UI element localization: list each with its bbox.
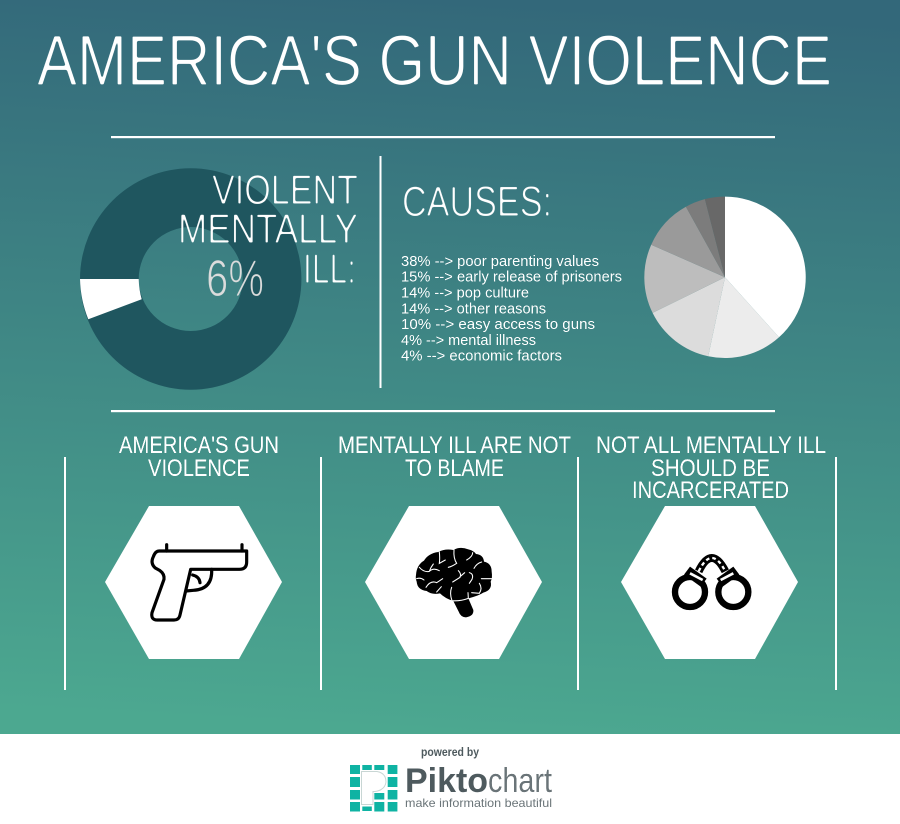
causes list: 4% --> economic factors xyxy=(401,348,562,365)
causes list: 10% --> easy access to guns xyxy=(401,316,595,333)
piktochart wordmark: Pikto xyxy=(405,762,488,800)
donut highlighted slice xyxy=(80,279,142,319)
heading: violent mentally ill: VIOLENT xyxy=(212,166,358,213)
piktochart wordmark: chart xyxy=(488,762,552,800)
heading: causes: CAUSES: xyxy=(402,178,552,226)
heading: violent mentally ill: ILL: xyxy=(303,245,356,292)
hexagon: handcuffs xyxy=(621,506,798,659)
powered by label: powered by xyxy=(421,745,479,759)
heading: not all mentally ill should be incarcerated xyxy=(596,432,826,504)
causes list: 15% --> early release of prisoners xyxy=(401,269,622,286)
heading: violent mentally ill: MENTALLY xyxy=(178,205,358,252)
causes list: 14% --> pop culture xyxy=(401,284,529,301)
causes list xyxy=(401,253,622,365)
piktochart wordmark xyxy=(405,762,552,800)
heading: america's gun violence xyxy=(119,432,279,482)
causes list: 14% --> other reasons xyxy=(401,300,546,317)
icon: pistol xyxy=(152,545,247,620)
icon: brain xyxy=(416,548,492,617)
hexagon: brain xyxy=(365,506,542,659)
heading: america's gun violence: AMERICA'S GUN xyxy=(119,432,279,459)
causes list: 4% --> mental illness xyxy=(401,332,536,349)
heading: not all mentally ill should be incarcerated: INCARCERATED xyxy=(632,477,789,504)
heading: mentally ill are not to blame: MENTALLY ILL ARE NOT xyxy=(338,432,571,459)
pie chart: causes xyxy=(644,197,806,358)
causes list: 38% --> poor parenting values xyxy=(401,253,599,270)
heading: not all mentally ill should be incarcerated: NOT ALL MENTALLY ILL xyxy=(596,432,826,459)
donut chart: violent mentally ill 6% xyxy=(80,168,301,390)
donut value 6%: 6% xyxy=(206,250,264,308)
hexagon: gun xyxy=(105,506,282,659)
heading: mentally ill are not to blame xyxy=(338,432,571,482)
footer panel xyxy=(0,734,900,824)
heading: violent mentally ill xyxy=(178,166,358,292)
tagline: make information beautiful xyxy=(405,796,552,810)
heading: not all mentally ill should be incarcerated: SHOULD BE xyxy=(651,455,770,482)
heading: mentally ill are not to blame: TO BLAME xyxy=(405,455,504,482)
piktochart logo mark xyxy=(350,765,397,812)
heading: america's gun violence: VIOLENCE xyxy=(148,455,250,482)
icon: handcuffs xyxy=(675,558,748,607)
